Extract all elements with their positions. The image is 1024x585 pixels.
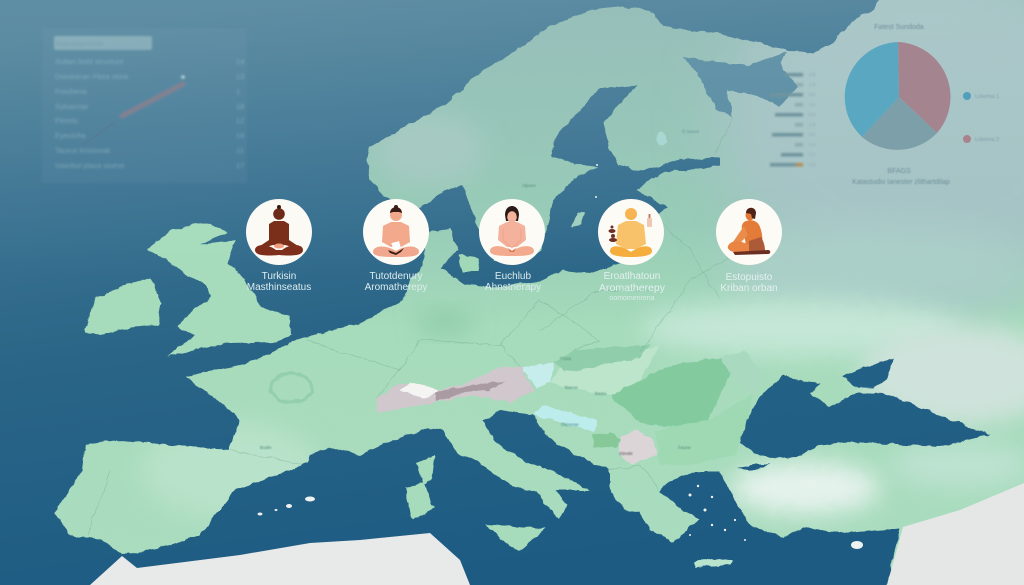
table rows: 13 <box>236 72 244 81</box>
trend line <box>80 84 183 147</box>
icon: aromatherapy figure 2 <box>363 199 429 265</box>
label: figure 4: Aromatherepy <box>599 282 666 294</box>
table rows: 12 <box>236 116 244 125</box>
bar chart: right edge: 2.8 <box>809 72 816 77</box>
small map labels: Bastu <box>595 391 607 396</box>
icon: figure 4 with aromatherapy bottles <box>598 199 664 265</box>
table rows: 16 <box>236 131 244 140</box>
table rows: 18 <box>236 102 244 111</box>
table rows: 17 <box>236 161 244 170</box>
bar chart: right edge: 1.6 <box>809 162 816 167</box>
legend: blue <box>963 92 999 100</box>
bar chart: right edge: 3.1 <box>809 132 816 137</box>
label: Turkish meditation <box>247 271 311 293</box>
France ring <box>270 374 312 402</box>
bar chart: right edge: 1.4 <box>809 142 816 147</box>
table rows: 11 <box>236 146 244 155</box>
slice: red <box>898 42 950 133</box>
bar chart: right edge: 3.2 <box>809 92 816 97</box>
Finland lake <box>657 132 667 146</box>
panel: left data table <box>42 28 247 183</box>
small map labels: D Sxaos <box>682 129 700 134</box>
label: figure 3 <box>485 271 541 293</box>
bar chart: right edge: 1.5 <box>809 82 816 87</box>
Middle East land <box>887 483 1024 585</box>
landmass: Ireland <box>85 278 162 335</box>
table header bar <box>54 36 152 50</box>
legend: blue: Lokema 1 <box>975 94 999 100</box>
label: figure 5: Kriban orban <box>720 283 778 294</box>
legend: red: Lokema 2 <box>975 137 999 143</box>
country patches <box>377 345 765 465</box>
small map labels: Flusa <box>560 356 572 361</box>
small map labels: Alpsen <box>522 183 536 188</box>
label: aromatherapy 2: Aromatherepy <box>365 282 427 293</box>
table rows: Istanbul plaza sisese <box>55 161 125 170</box>
pie title: Fatest Sundoda <box>874 24 924 31</box>
landmass: Britain <box>146 222 291 356</box>
table rows: Floretu <box>55 116 78 125</box>
top haze <box>0 0 1024 280</box>
pie caption: Katastudio Ianester zlithartdilap <box>852 179 950 186</box>
slice: grey <box>862 97 937 150</box>
label: figure 4: oomomenrena <box>609 295 655 302</box>
bar chart: right edge: 1.2 <box>809 102 816 107</box>
table rows: Sultan bold structure <box>55 57 124 66</box>
icon: figure 3 <box>479 199 545 265</box>
small map labels: Basoe <box>565 385 578 390</box>
table rows: 1 <box>236 87 240 96</box>
table rows: Sylvanrae <box>55 102 88 111</box>
inner seas <box>683 52 797 117</box>
islands <box>405 212 732 567</box>
label: figure 4 <box>599 271 666 302</box>
label: figure 3: Euchlub <box>495 271 532 282</box>
Mediterranean white islets <box>258 164 863 549</box>
pie caption <box>852 168 950 186</box>
small map labels: Stinskt <box>619 451 633 456</box>
bar chart: right edge: 2.7 <box>809 152 816 157</box>
pie caption: BFAGS <box>887 168 911 175</box>
bar chart: right edge: 3.4 <box>809 112 816 117</box>
table rows: Taurus Kristovak <box>55 146 111 155</box>
label: figure 5: Estopuisto <box>726 272 773 283</box>
icon: Turkish meditation <box>246 199 312 265</box>
pie chart <box>845 24 999 186</box>
icon: figure 5 side profile <box>716 199 782 265</box>
small map labels: Faune <box>678 445 691 450</box>
label: figure 4: Eroatlhatoun <box>604 271 660 282</box>
small map labels: Bodin <box>260 445 272 450</box>
table rows: 14 <box>236 57 244 66</box>
North Africa land <box>90 533 470 585</box>
table rows: Aqaopgenesis <box>56 39 104 48</box>
label: aromatherapy 2 <box>365 271 427 293</box>
legend: red <box>963 135 999 143</box>
label: Turkish meditation: Masthinseatus <box>247 282 311 293</box>
slice: blue <box>845 42 899 137</box>
bar chart: right edge <box>770 72 816 167</box>
small map labels: Otizevse <box>561 422 579 427</box>
label: figure 5 <box>720 272 778 294</box>
label: figure 3: Ahnstnerapy <box>485 282 541 293</box>
internal borders <box>88 117 760 535</box>
table rows <box>55 39 244 170</box>
label: aromatherapy 2: Tutotdenury <box>370 271 422 282</box>
label: Turkish meditation: Turkisin <box>262 271 296 282</box>
table rows: Dominican Flora store <box>55 72 128 81</box>
table rows: Fresheria <box>55 87 88 96</box>
small map labels <box>260 129 700 456</box>
table rows: Eyevicha <box>55 131 86 140</box>
bar chart: right edge: 1.8 <box>809 122 816 127</box>
